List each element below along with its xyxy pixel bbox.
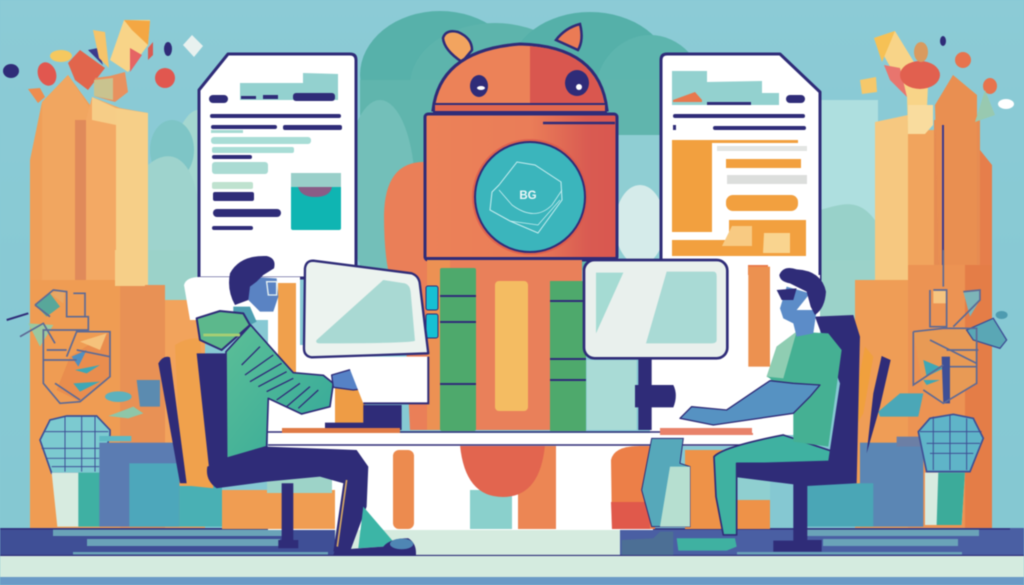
chair pole <box>278 483 298 548</box>
leaves <box>105 391 132 402</box>
right developer <box>622 268 860 555</box>
desk top <box>268 428 800 446</box>
yellow book <box>495 281 528 411</box>
orange chair stripe <box>847 347 873 440</box>
left developer shoe <box>358 507 393 548</box>
plant fragments <box>913 290 1008 403</box>
orange chair cushion <box>175 338 213 488</box>
pot base <box>925 473 965 525</box>
document left header block <box>240 73 338 100</box>
plant wire sculpture <box>20 290 110 403</box>
cabinet <box>807 437 927 527</box>
white wall behind left developer <box>184 277 365 440</box>
under-desk panel <box>222 440 770 530</box>
cyan side tabs <box>426 286 438 338</box>
trouser leg <box>714 435 838 535</box>
plant fragments <box>7 289 110 402</box>
robot chest badge <box>472 139 588 255</box>
right tower top confetti <box>860 31 1014 134</box>
badge label: BG <box>519 190 537 202</box>
robot left arm <box>384 162 430 430</box>
document right orange content <box>672 140 807 280</box>
wire basket pot <box>40 416 110 473</box>
second leg translucent <box>642 438 690 527</box>
left developer torso <box>226 325 333 458</box>
left developer hood <box>197 311 250 350</box>
background clouds <box>148 11 880 330</box>
left tower top confetti <box>3 20 203 103</box>
white wall behind right developer <box>650 275 820 435</box>
left monitor base <box>345 357 428 403</box>
document left thumbnail image <box>291 173 341 230</box>
right developer hair <box>779 268 826 315</box>
plant wire sculpture <box>913 250 980 403</box>
bottom band <box>0 577 1024 585</box>
navy chair back rest <box>158 357 187 483</box>
right monitor screen <box>584 260 727 358</box>
right developer torso <box>767 332 842 447</box>
right developer shoes <box>677 538 737 551</box>
robot torso <box>425 114 617 260</box>
right developer arm <box>680 381 820 425</box>
cabinet <box>99 436 222 527</box>
right plant and furniture <box>773 250 1008 552</box>
left developer hand <box>332 367 369 390</box>
sleeve stripes <box>242 347 318 408</box>
left developer <box>197 256 416 555</box>
left developer hair <box>229 256 275 305</box>
right developer face and neck <box>780 287 817 337</box>
lower robot column <box>427 258 582 430</box>
document right <box>661 54 820 280</box>
right developer chair back <box>737 315 860 486</box>
chair pole <box>773 480 822 552</box>
left monitor <box>304 261 428 430</box>
document right header block <box>672 71 779 105</box>
right orange towers <box>855 75 992 530</box>
left monitor screen <box>304 261 428 357</box>
floor <box>0 528 1024 585</box>
green book right <box>550 281 586 431</box>
right developer glasses <box>777 288 797 300</box>
right monitor stand <box>587 267 770 430</box>
green book left <box>440 268 476 431</box>
wire basket pot <box>918 414 983 472</box>
android robot <box>384 24 617 430</box>
robot ears <box>443 24 582 62</box>
left developer trousers <box>207 447 368 552</box>
left orange towers <box>30 75 205 530</box>
robot head dome <box>433 44 607 110</box>
left developer neck and face <box>233 307 257 325</box>
leaves <box>878 393 923 417</box>
left plant and furniture <box>7 289 298 548</box>
pot base <box>52 473 100 527</box>
robot eyes <box>470 70 589 97</box>
foreground floor strip <box>0 556 1024 577</box>
document left <box>199 54 356 278</box>
